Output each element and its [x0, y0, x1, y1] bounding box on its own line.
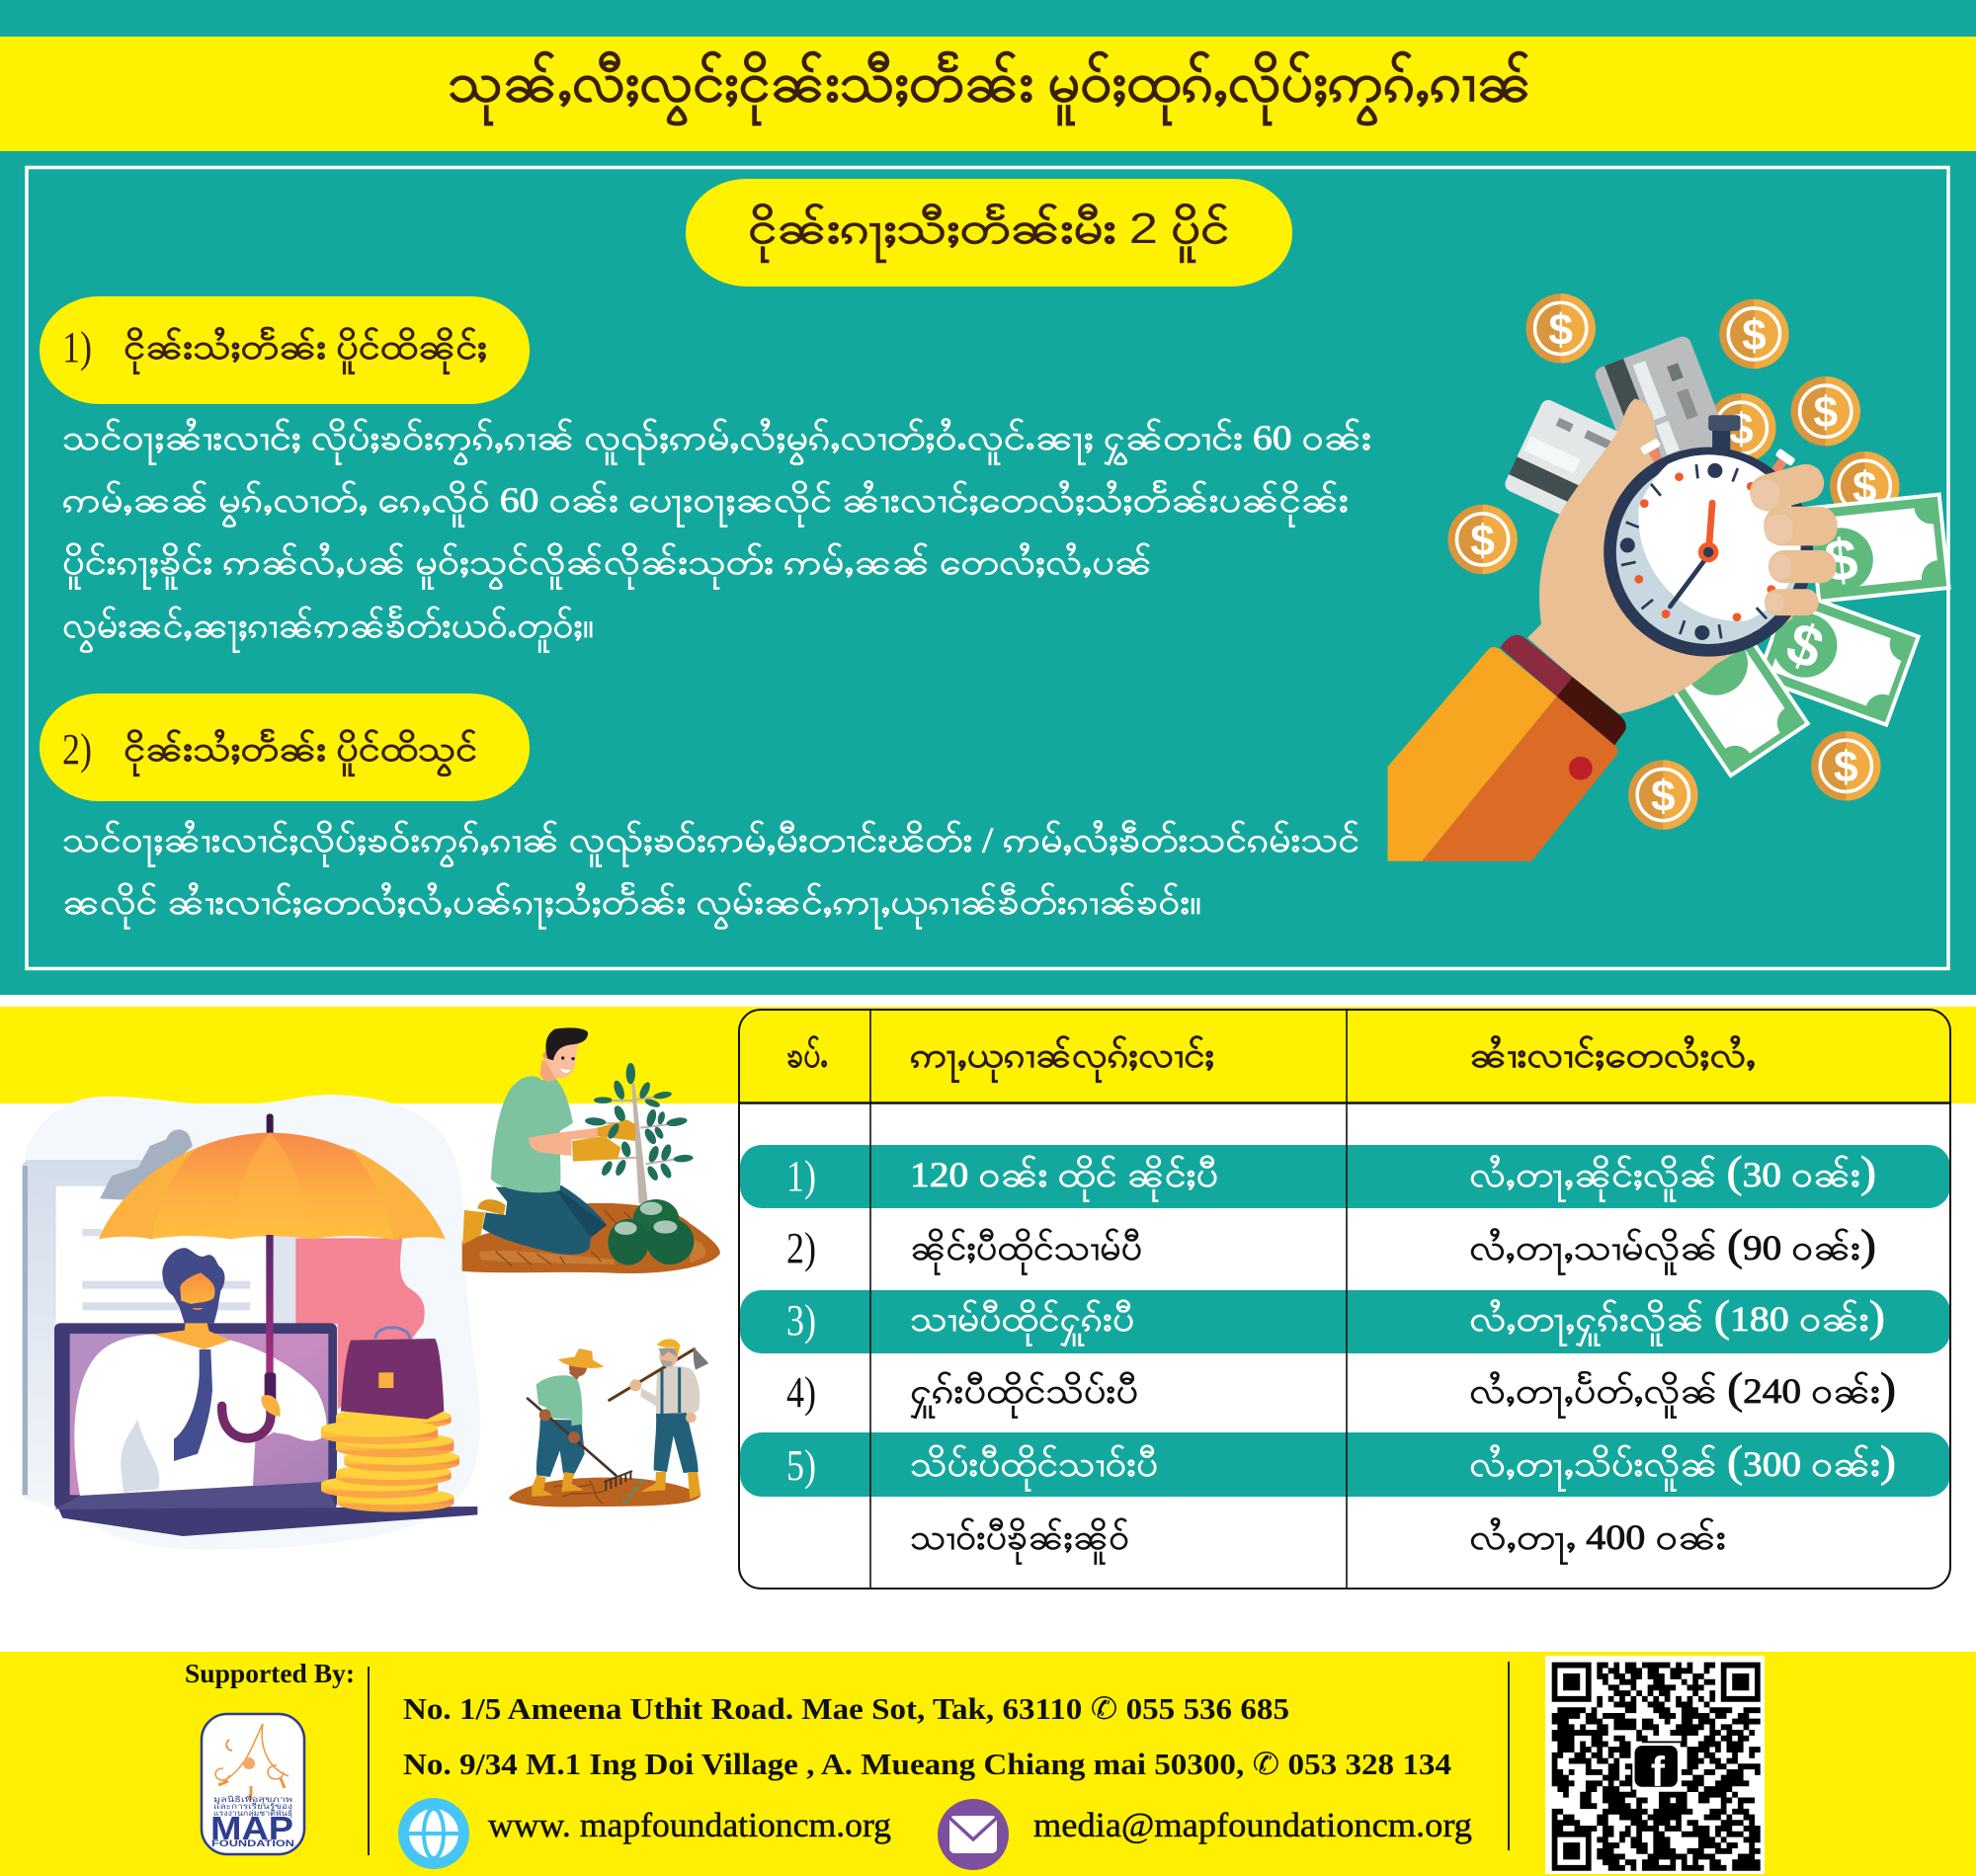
- icon: gold coins: $: [1651, 772, 1676, 820]
- row 4: ႁူၵ်းပီထိုင်သိပ်းပီ: [910, 1371, 1138, 1420]
- icon: gold coins: $: [1470, 517, 1495, 565]
- table header row: ၼၢႆးလၢင်ႈတေလႆႈလႆႇ: [1469, 1034, 1756, 1075]
- icon: hand: [1527, 399, 1793, 714]
- icon: globe: [398, 1798, 469, 1869]
- table header row: ၶပ်ႉ: [786, 1034, 828, 1075]
- icon: banknotes: $: [1822, 526, 1860, 595]
- laptop base: [54, 1482, 477, 1536]
- row 3: [786, 1292, 1885, 1347]
- QR code: [1545, 1656, 1765, 1874]
- row 4: လႆႇတႃႇပႅတ်ႇလိူၼ် (240 ဝၼ်း ): [1469, 1364, 1896, 1419]
- businessman: [74, 1248, 327, 1496]
- table grid lines: [739, 1010, 1950, 1589]
- icon: banknotes: [1652, 492, 1951, 778]
- icon: sleeve and cuff: [1388, 635, 1626, 861]
- website: www. mapfoundationcm.org: [488, 1806, 891, 1844]
- address line 2: No. 9/34 M.1 Ing Doi Village , A. Mueang Chiang mai 50300, ✆ 053 328 134: [403, 1747, 1451, 1782]
- row 1: လႆႇတႃႇၼိုင်ႈလိူၼ် (30 ဝၼ်း): [1469, 1148, 1876, 1202]
- icon: mail: [938, 1799, 1009, 1870]
- pill heading: type 1: ငိုၼ်းသႆႈတႅၼ်း ပိူင်ထိၼိုင်ႈ: [124, 326, 487, 375]
- table header row: [786, 1034, 1756, 1084]
- white frame panel: [27, 168, 1948, 968]
- soil: [462, 1203, 720, 1273]
- icon: white credit card: [1503, 397, 1644, 534]
- illustration: insurance umbrella over businessman on laptop: [23, 1095, 480, 1550]
- text block: type 1 description: ပိူင်းၵႃႈၶိူင်း ဢၼ်လႆႇပၼ် မူဝ်ႈသွင်လိူၼ်လိုၼ်းသုတ်း ဢမ်ႇၼၼ် တေလႆႈလႆႇပၼ်: [62, 542, 1152, 590]
- icon: gold coins: $: [1729, 405, 1754, 453]
- logo: MAP Foundation: มูลนิธิเพื่อสุขภาพ: [213, 1794, 292, 1804]
- pill heading: type 2: 2): [62, 725, 92, 774]
- icon: gold coins: [1447, 293, 1899, 830]
- pill heading: type 1: 1): [62, 323, 92, 371]
- row 5: လႆႇတႃႇသိပ်းလိူၼ် (300 ဝၼ်း ): [1469, 1437, 1896, 1492]
- row 2: လႆႇတႃႇသၢမ်လိူၼ် (90 ဝၼ်း): [1469, 1221, 1876, 1275]
- stack of gold coins: [321, 1408, 459, 1512]
- pink leaf: [295, 1238, 425, 1410]
- row 5: 5): [786, 1441, 816, 1490]
- address line 1: No. 1/5 Ameena Uthit Road. Mae Sot, Tak, 63110 ✆ 055 536 685: [403, 1691, 1289, 1727]
- title banner: [0, 37, 1976, 151]
- row 1: 120 ဝၼ်း ထိုင် ၼိုင်ႈပီ: [910, 1155, 1218, 1202]
- logo: MAP Foundation: และการเรียนรู้ของ: [213, 1802, 292, 1811]
- umbrella: [99, 1113, 446, 1438]
- icon: gold coins: $: [1852, 463, 1877, 512]
- laptop: [54, 1323, 337, 1509]
- tree with leaves: [585, 1063, 694, 1203]
- row 6: လႆႇတႃႇ 400 ဝၼ်း: [1469, 1517, 1726, 1565]
- icon: gold coins: $: [1548, 305, 1573, 354]
- icon: stopwatch: [1604, 415, 1813, 657]
- farmer kneeling: [462, 1027, 635, 1255]
- icon: fingers: [1746, 460, 1838, 615]
- row 2: 2): [786, 1224, 816, 1272]
- briefcase: [341, 1328, 444, 1420]
- divider: [369, 1662, 1509, 1855]
- row 2: ၼိုင်ႈပီထိုင်သၢမ်ပီ: [910, 1228, 1142, 1275]
- table header row: ဢႃႇယုၵၢၼ်လုၵ်ႈလၢင်ႈ: [910, 1034, 1214, 1084]
- teal row bars: [740, 1145, 1950, 1497]
- table: severance pay by length of service: [739, 1010, 1950, 1589]
- text block: type 2 description: [62, 820, 1359, 930]
- icon: gold coins: $: [1834, 743, 1858, 791]
- icon: grey credit card: [1593, 334, 1730, 480]
- yellow band behind table header: [0, 1007, 1976, 1103]
- row 4: 4): [786, 1368, 816, 1417]
- row 3: 3): [786, 1296, 816, 1345]
- row 4: [786, 1364, 1896, 1420]
- icon: banknotes: $: [1778, 609, 1832, 682]
- pill heading: two kinds of severance pay: [686, 179, 1292, 286]
- text block: type 2 description: ၼလိုင် ၼၢႆးလၢင်ႈတေလႆႈလႆႇပၼ်ၵႃႈသႆႈတႅၼ်း လွမ်းၼင်ႇဢႃႇယုၵၢၼ်ၶဵတ်းၵၢၼ်ၶဝ်း။: [62, 882, 1201, 930]
- logo: MAP Foundation: FOUNDATION: [211, 1838, 294, 1848]
- logo: MAP Foundation: [202, 1714, 304, 1854]
- logo: MAP Foundation: MAP: [210, 1810, 293, 1846]
- text block: type 1 description: သင်ဝႃႈၼၢႆးလၢင်ႈ လိုပ်ႈၶဝ်းဢွၵ်ႇၵၢၼ် လူၺ်ႈဢမ်ႇလႆႈမွၵ်ႇလၢတ်ႈဝႆႉလူင်ႉၼႃႈ ႁွၼ်တၢင်း 60 ဝၼ်း: [62, 418, 1371, 466]
- supported by label: Supported By:: [185, 1659, 355, 1688]
- row 6: [910, 1517, 1726, 1565]
- text block: type 1 description: ဢမ်ႇၼၼ် မွၵ်ႇလၢတ်ႇ ၵေႇလိူဝ် 60 ဝၼ်း ပေႃးဝႃႈၼလိုင် ၼၢႆးလၢင်ႈတေလႆႈသႆႈတႅၼ်းပၼ်ငိုၼ်း: [62, 480, 1349, 528]
- row 5: သိပ်းပီထိုင်သၢဝ်းပီ: [910, 1444, 1158, 1492]
- pill heading: type 2: [40, 693, 530, 801]
- pill heading: two kinds of severance pay: ငိုၼ်းၵႃႈသီႈတႅၼ်းမီး 2 ပိူင်: [748, 203, 1229, 264]
- pill heading: type 2: ငိုၼ်းသႆႈတႅၼ်း ပိူင်ထိသွင်: [124, 728, 477, 777]
- right farmer with hoe: [610, 1339, 708, 1500]
- footer band: [0, 1652, 1976, 1876]
- pill heading: type 1: [40, 296, 530, 404]
- icon: gold coins: $: [1742, 311, 1767, 360]
- text block: type 1 description: [62, 418, 1371, 653]
- row 6: သၢဝ်းပီၶိုၼ်ႈၼိူဝ်: [910, 1517, 1129, 1565]
- illustration: man planting a tree with watermelons: [462, 1027, 720, 1273]
- row 2: [786, 1221, 1876, 1275]
- row 1: 1): [786, 1152, 816, 1200]
- row 5: [786, 1437, 1896, 1492]
- logo: MAP Foundation: แรงงานกลุ่มชาติพันธุ์: [213, 1809, 292, 1818]
- QR code: f: [1651, 1749, 1666, 1796]
- row 3: လႆႇတႃႇႁူၵ်းလိူၼ် (180 ဝၼ်း ): [1469, 1292, 1885, 1347]
- text block: type 1 description: လွမ်းၼင်ႇၼႃႈၵၢၼ်ဢၼ်ၶႅတ်းယဝ်ႉတူဝ်ႈ။: [62, 606, 594, 653]
- left farmer with rake: [528, 1348, 632, 1497]
- soil: [509, 1478, 700, 1507]
- icon: gold coins: $: [1813, 388, 1838, 437]
- row 3: သၢမ်ပီထိုင်ႁူၵ်းပီ: [910, 1299, 1134, 1347]
- title banner: သုၼ်ႇလီႈလွင်ႈငိုၼ်းသီႈတႅၼ်း မူဝ်ႈထုၵ်ႇလိုပ်ႈဢွၵ်ႇၵၢၼ်: [448, 51, 1531, 125]
- illustration: two farmers with rake and hoe: [509, 1339, 708, 1507]
- illustration: hand holding stopwatch with coins, cards and banknotes: [1388, 293, 1951, 861]
- top section background: [0, 0, 1976, 995]
- watermelons: [608, 1199, 694, 1265]
- row 1: [786, 1148, 1876, 1202]
- text block: type 2 description: သင်ဝႃႈၼၢႆးလၢင်ႈလိုပ်ႈၶဝ်းဢွၵ်ႇၵၢၼ် လူၺ်ႈၶဝ်းဢမ်ႇမီးတၢင်းၽိတ်း / ဢမ်ႇလႆႈၶဵတ်းသင်ၵမ်းသင်: [62, 820, 1359, 867]
- email: media@mapfoundationcm.org: [1033, 1806, 1472, 1844]
- clipboard: [23, 1129, 295, 1501]
